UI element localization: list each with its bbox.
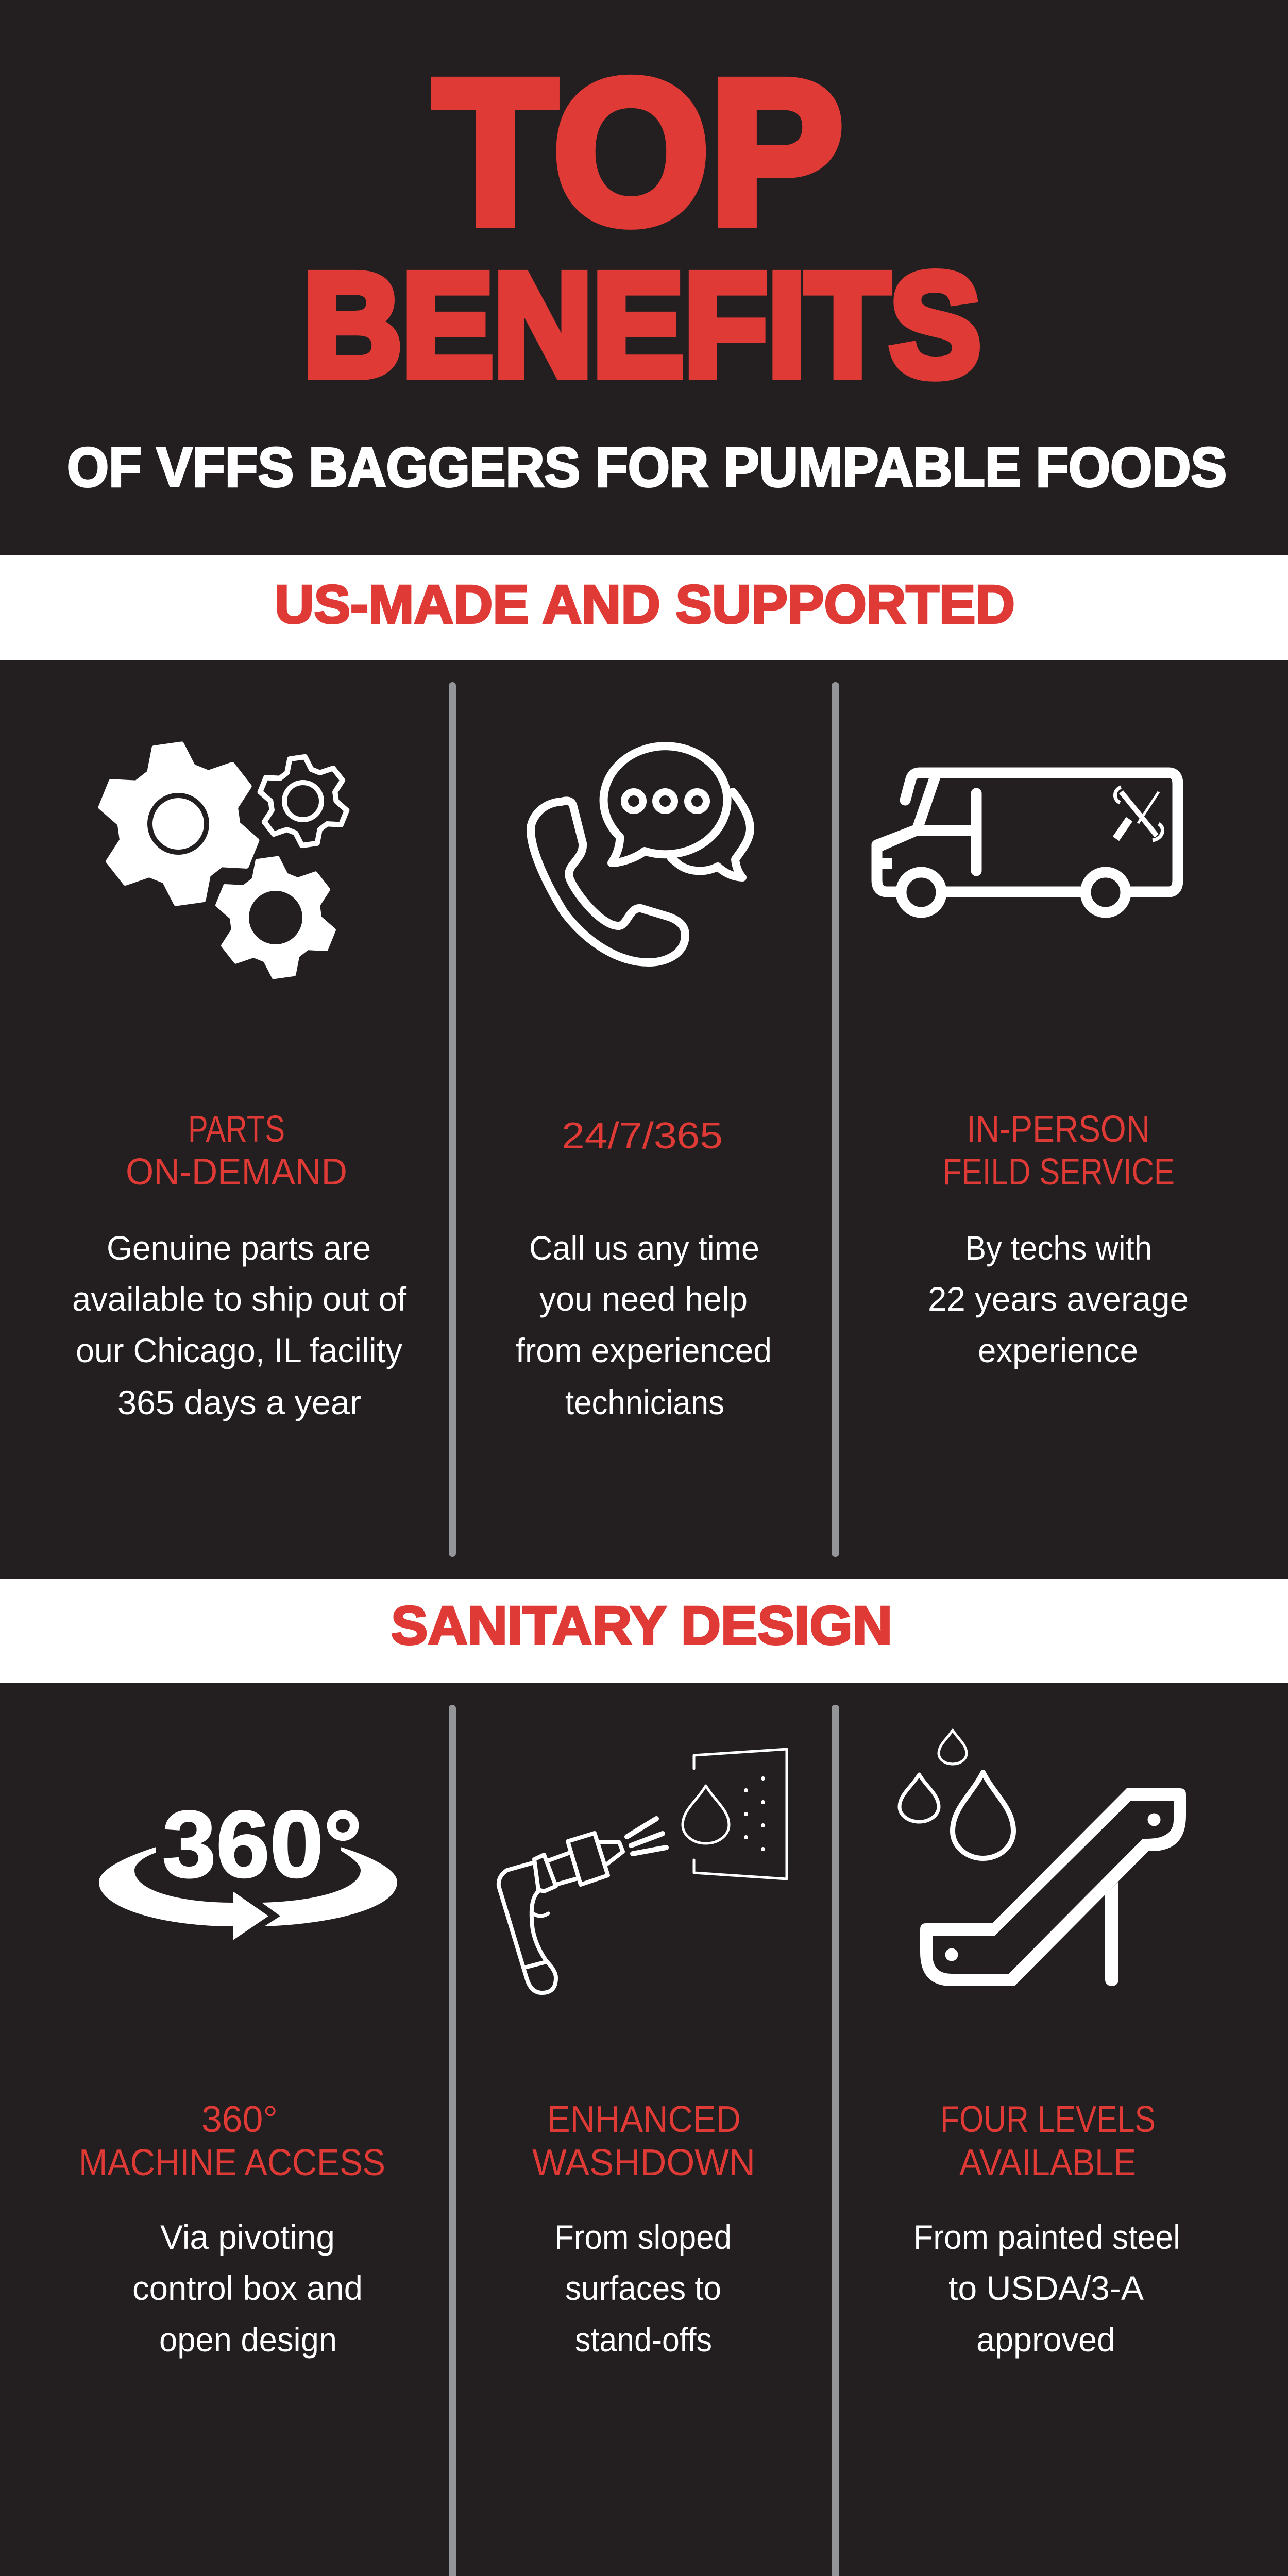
icon: phone with speech bubbles	[531, 746, 750, 962]
heading band: US-made and supported: US-MADE AND SUPPORTED	[275, 574, 1015, 635]
text: access description	[132, 2218, 363, 2359]
label: four levels available	[940, 2099, 1156, 2183]
title: BENEFITS: BENEFITS	[303, 243, 981, 407]
label: enhanced washdown	[532, 2099, 755, 2183]
label: 360 machine access: 360°	[201, 2099, 278, 2140]
text: parts description: available to ship out of	[72, 1280, 407, 1318]
icon: 360 degree arrow: 360°	[162, 1791, 362, 1897]
panel: US-made and supported	[0, 555, 1288, 1557]
label: parts on-demand: ON-DEMAND	[126, 1151, 347, 1193]
text: call description: you need help	[539, 1280, 748, 1318]
text: washdown description: stand-offs	[575, 2320, 712, 2359]
text: access description: Via pivoting	[160, 2218, 335, 2256]
label: in-person feild service: IN-PERSON	[967, 1109, 1150, 1150]
text: parts description: our Chicago, IL facility	[76, 1331, 402, 1369]
text: service description: experience	[978, 1331, 1138, 1369]
title: TOP: TOP	[434, 38, 843, 266]
text: washdown description: From sloped	[554, 2218, 732, 2256]
text: levels description: approved	[976, 2320, 1115, 2359]
icon: 360 degree arrow	[99, 1791, 397, 1940]
heading band: sanitary design	[0, 1579, 1288, 1683]
text: washdown description	[554, 2218, 732, 2359]
label: in-person feild service	[943, 1109, 1175, 1193]
subtitle: OF VFFS BAGGERS FOR PUMPABLE FOODS	[67, 436, 1227, 498]
label: in-person feild service: FEILD SERVICE	[943, 1151, 1175, 1193]
text: service description	[928, 1229, 1189, 1369]
text: parts description: Genuine parts are	[107, 1229, 371, 1267]
panel: sanitary design	[0, 1579, 1288, 2576]
heading band: sanitary design: SANITARY DESIGN	[391, 1596, 892, 1656]
text: levels description	[913, 2218, 1180, 2359]
label: 360 machine access: MACHINE ACCESS	[79, 2142, 385, 2183]
text: call description: technicians	[565, 1383, 724, 1421]
text: call description: Call us any time	[529, 1229, 759, 1267]
text: parts description: 365 days a year	[117, 1383, 361, 1421]
column: in-person field service	[928, 1109, 1189, 1369]
label: 24/7/365: 24/7/365	[562, 1115, 723, 1157]
icon: service van with tools	[877, 773, 1178, 912]
text: levels description: to USDA/3-A	[948, 2269, 1144, 2307]
text: access description: control box and	[132, 2269, 363, 2307]
column: four levels available	[913, 2099, 1180, 2359]
text: parts description	[72, 1229, 407, 1421]
label: enhanced washdown: WASHDOWN	[532, 2142, 755, 2183]
column: parts on-demand	[72, 1109, 407, 1421]
icon: gears	[93, 736, 351, 984]
heading band: US-made and supported	[0, 555, 1288, 660]
title block	[67, 38, 1227, 498]
text: call description: from experienced	[516, 1331, 772, 1369]
text: service description: 22 years average	[928, 1280, 1189, 1318]
icon: spray nozzle and panel	[499, 1749, 787, 1993]
text: access description: open design	[159, 2320, 337, 2359]
text: service description: By techs with	[965, 1229, 1152, 1267]
label: parts on-demand: PARTS	[188, 1109, 285, 1150]
icon: drops and conveyor	[900, 1730, 1186, 1986]
text: call description	[516, 1229, 772, 1421]
text: levels description: From painted steel	[913, 2218, 1180, 2256]
column: enhanced washdown	[532, 2099, 755, 2359]
label: 360 machine access	[79, 2099, 385, 2183]
label: parts on-demand	[126, 1109, 347, 1193]
label: enhanced washdown: ENHANCED	[547, 2099, 741, 2140]
label: four levels available: FOUR LEVELS	[940, 2099, 1156, 2140]
label: four levels available: AVAILABLE	[959, 2142, 1136, 2183]
column: 360 machine access	[79, 2099, 385, 2359]
column: 24/7/365	[516, 1115, 772, 1421]
text: washdown description: surfaces to	[565, 2269, 721, 2307]
